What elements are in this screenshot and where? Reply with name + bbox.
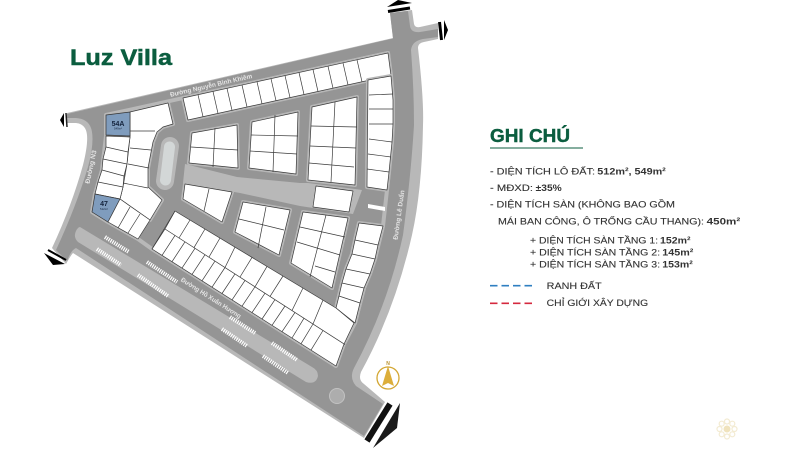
lots: inner block 4 (313, 186, 353, 212)
floor area: MÁI BAN CÔNG, Ô TRỐNG CẦU THANG): (498, 215, 704, 226)
floor area: - DIỆN TÍCH SÀN (KHÔNG BAO GỒM (490, 199, 675, 210)
white slit (368, 204, 385, 211)
land area: - DIỆN TÍCH LÔ ĐẤT: (490, 166, 595, 176)
building density: - MĐXD: (490, 183, 533, 193)
title: Luz Villa (70, 45, 173, 70)
lots: west column (95, 136, 130, 199)
icon: flower logo (717, 419, 737, 439)
lots: south-west trio (108, 199, 150, 239)
lot 47 highlighted (92, 194, 120, 222)
lots: inner block 2 (249, 112, 298, 174)
legend: boundary line: RANH ĐẤT (547, 281, 602, 291)
lots: east column upper (367, 76, 393, 190)
block base (92, 53, 393, 366)
lot 47 highlighted: 512m² (100, 207, 108, 211)
floor 1: + DIỆN TÍCH SÀN TẦNG 1: (530, 235, 658, 245)
floor 2: 145m² (662, 248, 693, 258)
lots: north strip (183, 53, 391, 120)
floor 1: 152m² (660, 235, 690, 245)
floor area (490, 199, 740, 226)
building density: ±35% (536, 183, 562, 193)
lots: inner block 1 (189, 125, 238, 168)
floor 3: 153m² (662, 260, 693, 270)
lots: east column lower (336, 223, 383, 323)
lots: inner block 7 (291, 212, 348, 288)
arrow: north (387, 0, 412, 12)
lots: inner block 3 (308, 97, 357, 185)
floor 2: + DIỆN TÍCH SÀN TẦNG 2: (530, 248, 660, 258)
heading underline (490, 148, 583, 149)
lots: inner block 6 (235, 202, 290, 255)
road network (52, 10, 438, 438)
street name: Nguyễn Bỉnh Khiêm: Đường Nguyễn Bỉnh Khiêm (169, 71, 253, 99)
central plaza (183, 164, 362, 214)
arrow: south-west (44, 250, 66, 265)
arrow: south-east (367, 403, 400, 448)
building density (490, 183, 562, 193)
lots: north-west block (120, 103, 173, 220)
legend heading: GHI CHÚ (490, 125, 570, 146)
pond (165, 146, 170, 181)
street name: N3: Đường N3 (85, 149, 99, 184)
land area: 512m², 549m² (597, 166, 666, 176)
lots: inner block 5 (183, 184, 232, 222)
icon: north compass: N (386, 361, 390, 367)
lot 54A highlighted: 549m² (114, 126, 122, 130)
icon: north compass (377, 361, 399, 389)
floor 3: + DIỆN TÍCH SÀN TẦNG 3: (530, 260, 660, 270)
lots: south double row (152, 211, 354, 366)
legend panel (490, 125, 740, 308)
arrow: east (440, 20, 448, 40)
lot 54A highlighted: 54A (112, 121, 124, 128)
legend: construction line: CHỈ GIỚI XÂY DỰNG (547, 297, 648, 308)
street name: Lê Duẩn: Đường Lê Duẩn (392, 190, 406, 240)
lot 54A highlighted (106, 112, 130, 136)
lot 47 highlighted: 47 (100, 201, 108, 208)
site map (44, 0, 448, 448)
street name: Hồ Xuân Hương: Đường Hồ Xuân Hương (179, 275, 243, 320)
floor area: 450m² (707, 216, 740, 226)
land area (490, 166, 666, 176)
arrow: west (60, 113, 67, 127)
parking stripes (97, 237, 297, 373)
legend: boundary line (490, 281, 602, 291)
